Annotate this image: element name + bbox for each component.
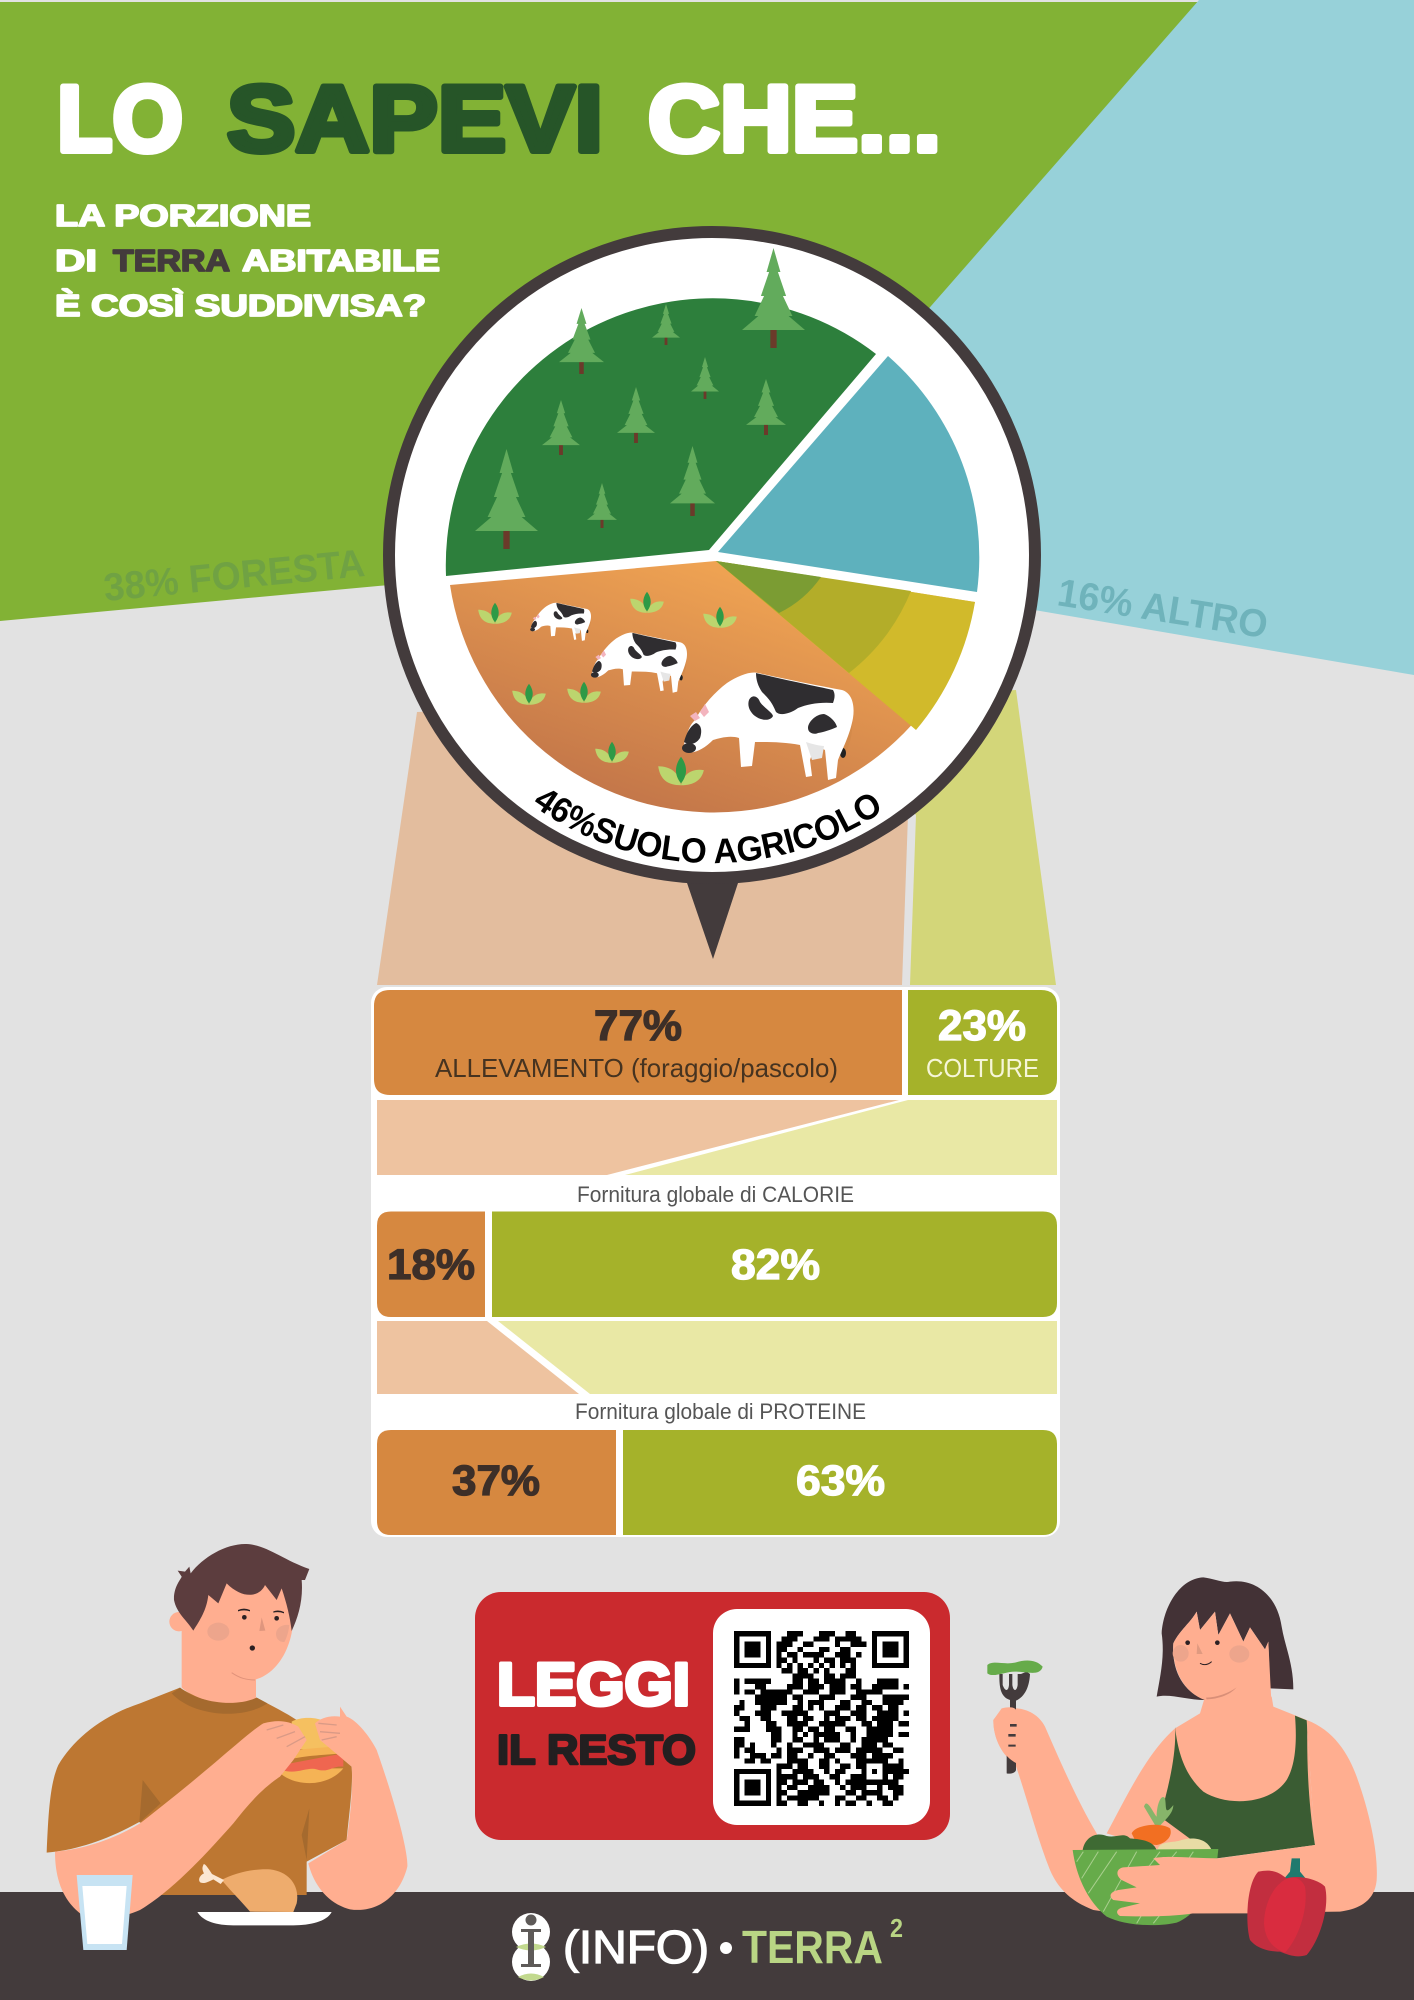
label: 38% foresta: 38% FORESTA	[102, 542, 367, 610]
title: CHE...	[648, 66, 941, 171]
red card	[475, 1592, 950, 1840]
value 82%: 82%	[731, 1241, 820, 1289]
face details	[1185, 1640, 1237, 1699]
funnel: livestock	[377, 700, 908, 985]
value 37%: 37%	[452, 1457, 540, 1505]
white qr tile	[713, 1609, 930, 1825]
slice: agricultural land	[450, 561, 975, 812]
burger	[278, 1718, 343, 1783]
heading: calories: Fornitura globale di CALORIE	[577, 1182, 854, 1207]
value 77%: 77%	[594, 1002, 682, 1050]
text: il resto: IL RESTO	[497, 1726, 696, 1773]
plate	[197, 1912, 332, 1925]
hair	[1157, 1577, 1293, 1700]
logo mark	[512, 1913, 550, 1981]
value 18%: 18%	[387, 1241, 475, 1289]
logo	[512, 1913, 903, 1981]
footer band	[0, 1892, 1414, 2000]
panel: teal other sector	[713, 0, 1414, 675]
illustration: man eating	[47, 1544, 407, 1950]
right arm	[308, 1707, 407, 1910]
shirt folds	[139, 1780, 309, 1860]
call to action	[475, 1592, 950, 1840]
crop bands	[716, 561, 975, 730]
slice: forest	[446, 248, 876, 576]
subtitle: DI	[55, 243, 97, 278]
raised arm	[993, 1708, 1117, 1913]
title	[57, 66, 941, 171]
bar: calories	[377, 1212, 1057, 1317]
label allevamento: ALLEVAMENTO (foraggio/pascolo)	[435, 1053, 838, 1083]
face	[1173, 1612, 1272, 1708]
value 23%: 23%	[938, 1002, 1026, 1050]
label: 16% altro: 16% ALTRO	[1055, 571, 1271, 647]
torso and shoulders	[1107, 1697, 1315, 1858]
chicken leg	[199, 1864, 297, 1912]
hair	[174, 1544, 309, 1631]
logo text: info: (INFO)	[563, 1921, 709, 1973]
subtitle: TERRA	[113, 243, 230, 278]
cheeks	[207, 1623, 289, 1642]
title: LO	[57, 66, 183, 171]
finger lines	[267, 1723, 340, 1747]
connector: row 1 to calories	[377, 1100, 1057, 1175]
shirt	[47, 1688, 352, 1895]
left arm	[55, 1721, 307, 1918]
connector: calories to proteins	[377, 1321, 1057, 1394]
logo text: terra: TERRA	[742, 1921, 883, 1973]
icon: cows	[530, 603, 854, 780]
pointer	[686, 880, 739, 959]
text: leggi: LEGGI	[497, 1651, 690, 1718]
slice: other	[718, 356, 979, 592]
logo superscript: 2	[890, 1913, 903, 1943]
tank top	[1160, 1716, 1315, 1858]
right arm	[1153, 1720, 1377, 1913]
panel: bars	[371, 987, 1060, 1537]
curved label: 46%SUOLO AGRICOLO	[535, 790, 880, 864]
glass of milk	[77, 1875, 133, 1950]
face details	[238, 1609, 284, 1651]
subtitle: LA PORZIONE	[55, 198, 311, 233]
collar	[172, 1688, 267, 1714]
subtitle	[55, 198, 440, 323]
panel background	[371, 987, 1060, 1537]
badge ring	[389, 232, 1035, 878]
funnel: crops	[800, 690, 1056, 985]
value 63%: 63%	[796, 1457, 885, 1505]
fork	[987, 1660, 1043, 1774]
salad contents	[1083, 1797, 1212, 1850]
hand fingers	[993, 1707, 1018, 1763]
logo bullet	[720, 1942, 732, 1954]
red pepper	[1247, 1858, 1326, 1956]
heading: proteins: Fornitura globale di PROTEINE	[575, 1399, 866, 1424]
salad bowl	[1073, 1849, 1218, 1925]
bar: proteins	[377, 1430, 1057, 1535]
hand on bowl	[1111, 1857, 1253, 1916]
ear	[169, 1612, 189, 1631]
icon: plants	[478, 592, 737, 785]
pie chart badge	[383, 226, 1041, 883]
illustration: woman eating salad	[987, 1577, 1377, 1956]
icon: trees	[475, 248, 805, 549]
bar: land use	[374, 990, 1057, 1095]
title: SAPEVI	[227, 66, 603, 171]
label colture: COLTURE	[926, 1053, 1039, 1083]
qr code	[734, 1631, 909, 1806]
cheeks	[1173, 1645, 1249, 1663]
subtitle: ABITABILE	[242, 243, 440, 278]
neck and head	[182, 1577, 293, 1704]
subtitle: È COSÌ SUDDIVISA?	[55, 288, 426, 323]
panel: green forest sector	[0, 2, 1199, 621]
